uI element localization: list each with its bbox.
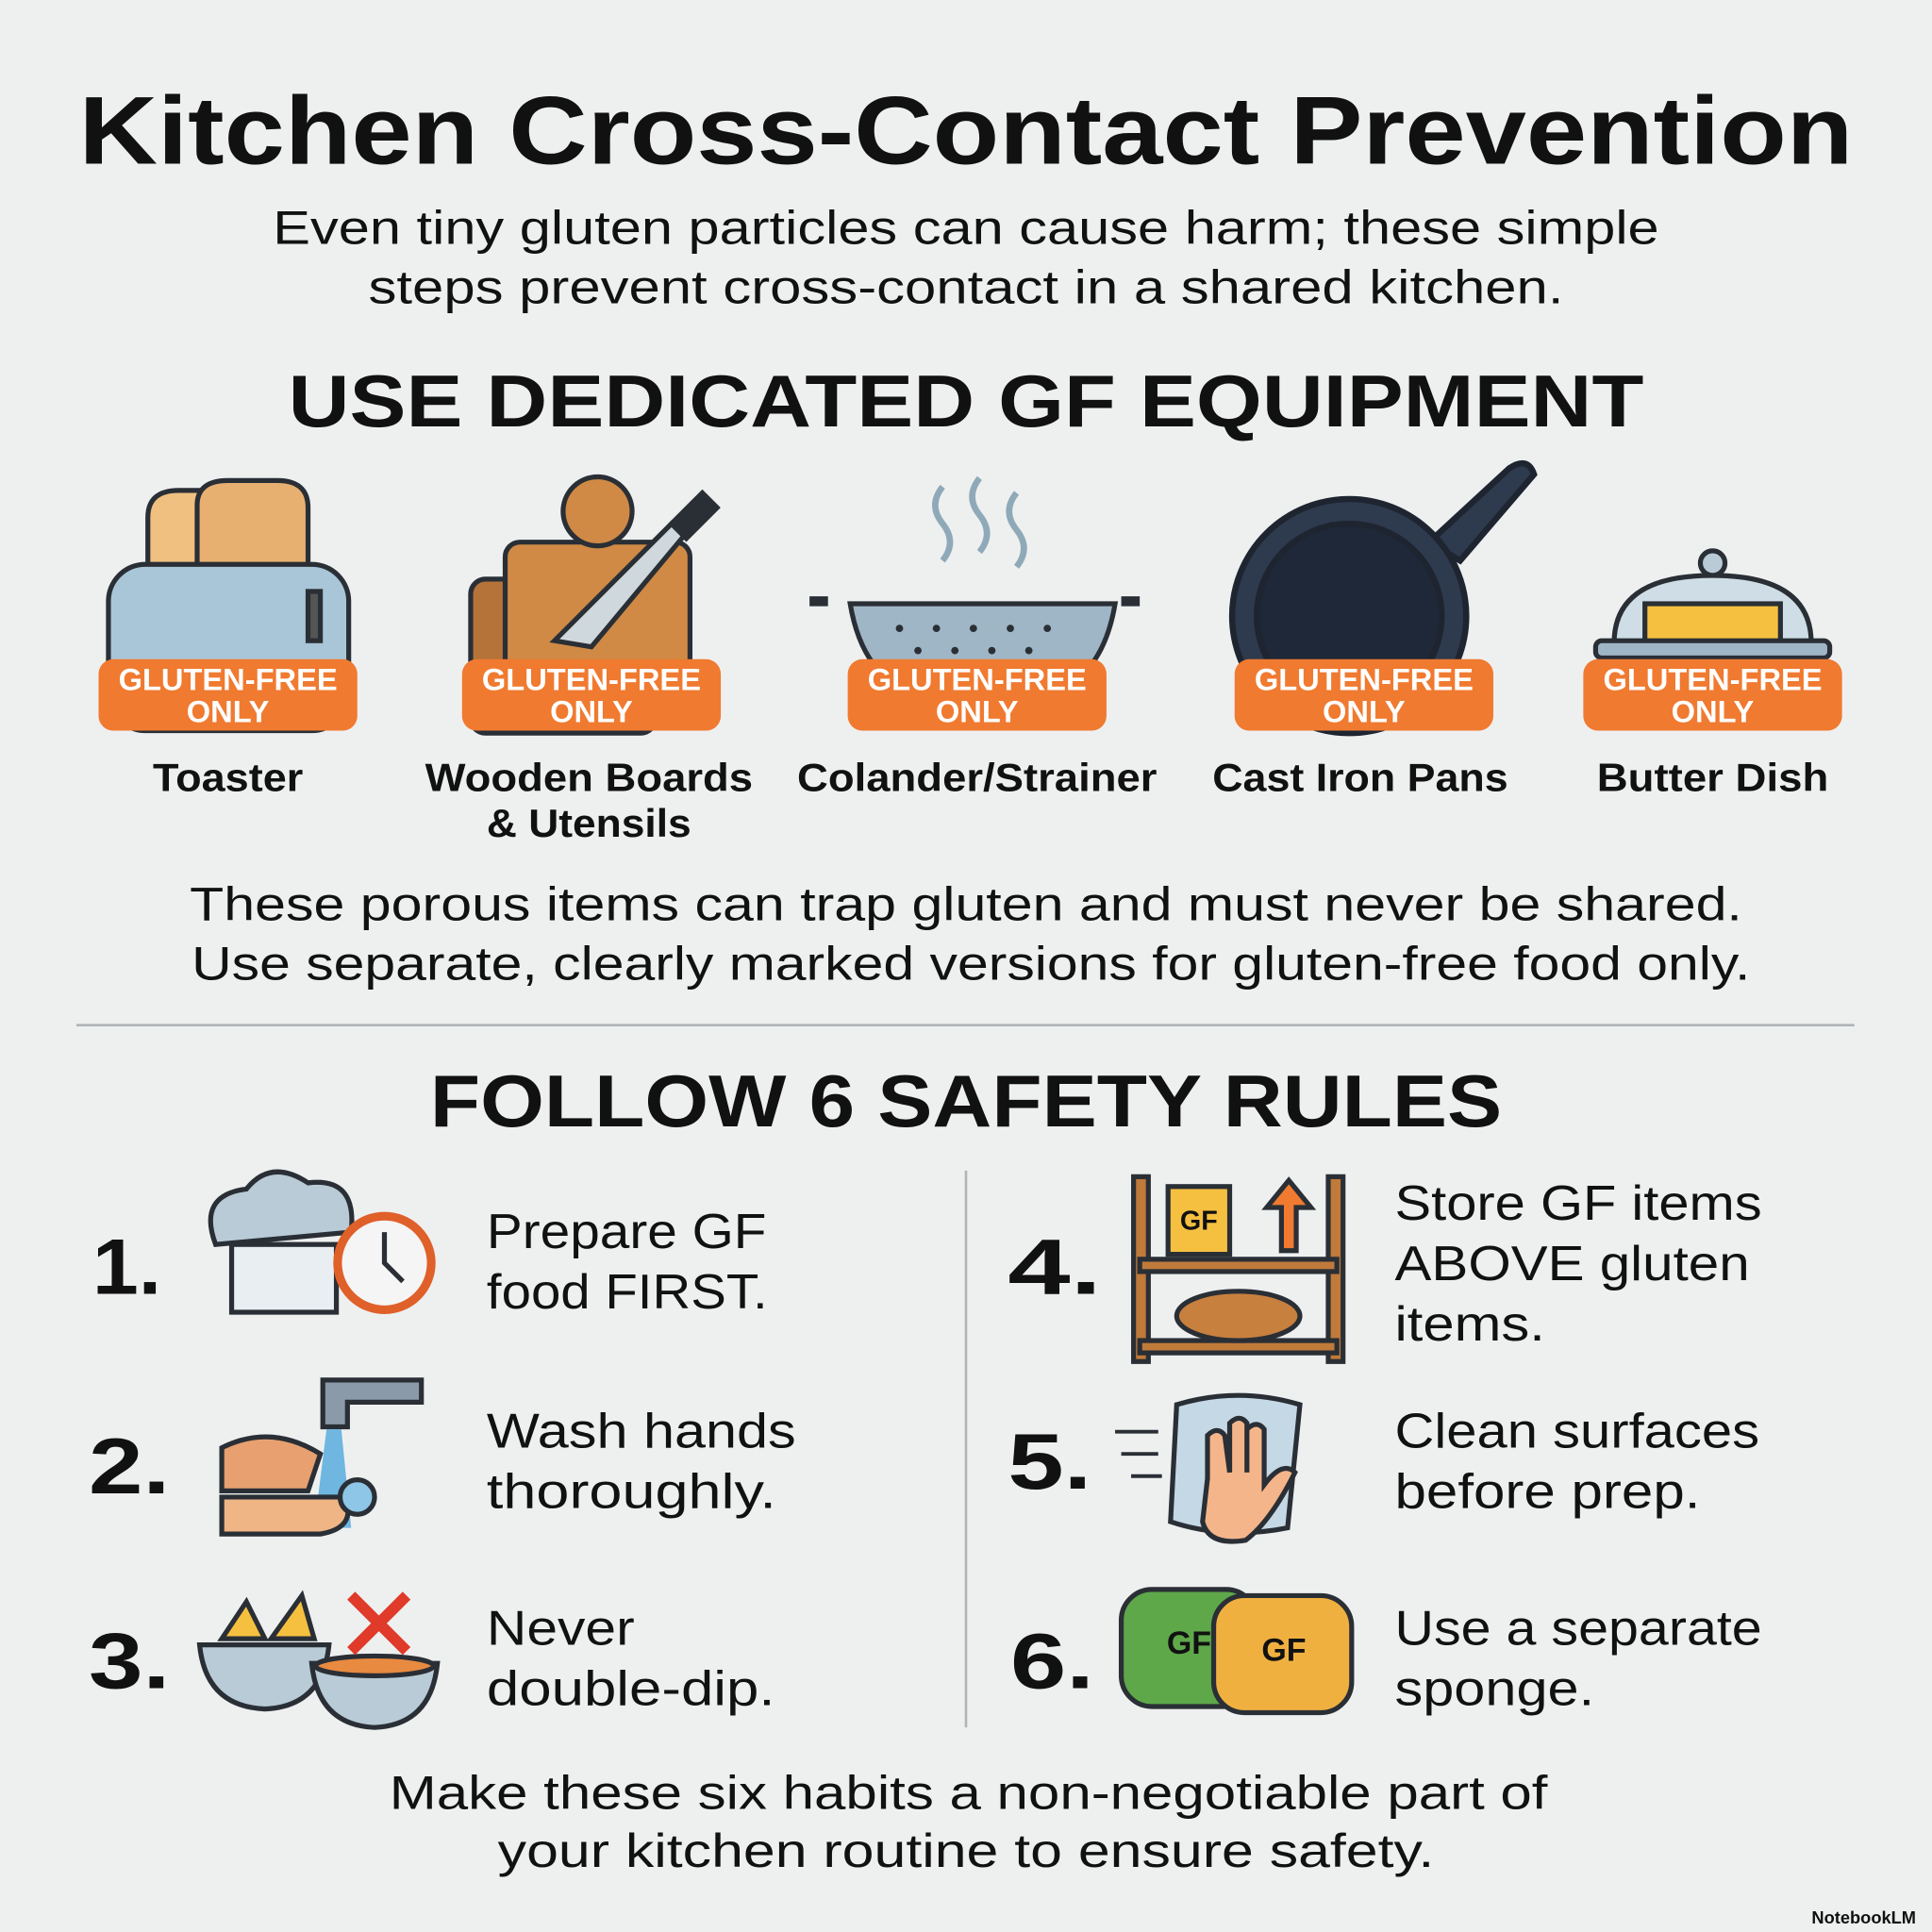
rule 4: Store GF items: [1395, 1176, 1762, 1231]
paragraph: These porous items can trap gluten and must never be shared.: [190, 878, 1742, 931]
rule 4: 4.: [1008, 1222, 1102, 1310]
rule 4: [1008, 1176, 1762, 1361]
badges: ONLY: [187, 693, 270, 728]
equipment labels: Colander/Strainer: [797, 756, 1157, 800]
equipment labels: Cast Iron Pans: [1212, 756, 1508, 800]
badges: GLUTEN-FREE: [1255, 661, 1474, 696]
heading: equipment: USE DEDICATED GF EQUIPMENT: [289, 359, 1644, 442]
subtitle: [273, 202, 1659, 313]
rule 4: ABOVE gluten: [1395, 1237, 1750, 1291]
rule 4: items.: [1395, 1297, 1545, 1352]
rule 6: sponge.: [1395, 1662, 1594, 1717]
badges: GLUTEN-FREE: [482, 661, 701, 696]
icon: toaster: [108, 480, 349, 731]
title: Kitchen Cross-Contact Prevention: [79, 77, 1853, 185]
rule 2: Wash hands: [487, 1405, 796, 1459]
rule 5: 5.: [1008, 1417, 1091, 1506]
rule 6: GF: [1167, 1625, 1211, 1661]
rule 3: 3.: [89, 1616, 170, 1705]
rule 2: thoroughly.: [487, 1465, 776, 1520]
icon: colander: [809, 478, 1140, 696]
icon: cast iron pan: [1232, 463, 1534, 733]
rule 3: Never: [487, 1602, 635, 1657]
rule 3: [89, 1595, 775, 1727]
heading: rules: FOLLOW 6 SAFETY RULES: [430, 1059, 1502, 1142]
subtitle: steps prevent cross-contact in a shared kitchen.: [369, 260, 1563, 313]
equipment labels: [153, 756, 1828, 845]
rule 4: GF: [1180, 1207, 1218, 1237]
equipment labels: Wooden Boards: [425, 756, 753, 800]
rule 5: Clean surfaces: [1395, 1405, 1759, 1459]
badges: GLUTEN-FREE: [868, 661, 1087, 696]
footer text: [390, 1766, 1548, 1877]
badges: ONLY: [936, 693, 1019, 728]
rule 1: Prepare GF: [487, 1205, 766, 1259]
rule 6: GF: [1261, 1633, 1307, 1669]
subtitle: Even tiny gluten particles can cause harm; these simple: [273, 202, 1659, 255]
equipment labels: Butter Dish: [1597, 756, 1828, 800]
badges: [98, 659, 1842, 731]
badges: ONLY: [1323, 693, 1406, 728]
icon: butter dish: [1595, 551, 1830, 658]
rule 6: [1010, 1590, 1762, 1717]
rule 5: [1008, 1395, 1759, 1541]
equipment labels: & Utensils: [487, 801, 691, 845]
paragraph: [190, 878, 1750, 990]
rule 1: food FIRST.: [487, 1265, 768, 1320]
paragraph: Use separate, clearly marked versions for gluten-free food only.: [192, 937, 1750, 990]
logo: NotebookLM: NotebookLM: [1811, 1907, 1916, 1927]
footer text: Make these six habits a non-negotiable part of: [390, 1766, 1548, 1819]
rule 5: before prep.: [1395, 1465, 1700, 1520]
rule 1: [92, 1172, 768, 1320]
badges: GLUTEN-FREE: [119, 661, 338, 696]
icon: cutting board and knife: [471, 476, 717, 733]
footer text: your kitchen routine to ensure safety.: [498, 1824, 1434, 1877]
rule 6: 6.: [1010, 1616, 1094, 1705]
rule 1: 1.: [92, 1222, 161, 1310]
rule 2: [89, 1380, 796, 1534]
badges: ONLY: [550, 693, 633, 728]
badges: GLUTEN-FREE: [1603, 661, 1823, 696]
equipment labels: Toaster: [153, 756, 303, 800]
badges: ONLY: [1672, 693, 1755, 728]
rule 3: double-dip.: [487, 1662, 775, 1717]
rule 2: 2.: [89, 1422, 170, 1510]
rule 6: Use a separate: [1395, 1602, 1762, 1657]
